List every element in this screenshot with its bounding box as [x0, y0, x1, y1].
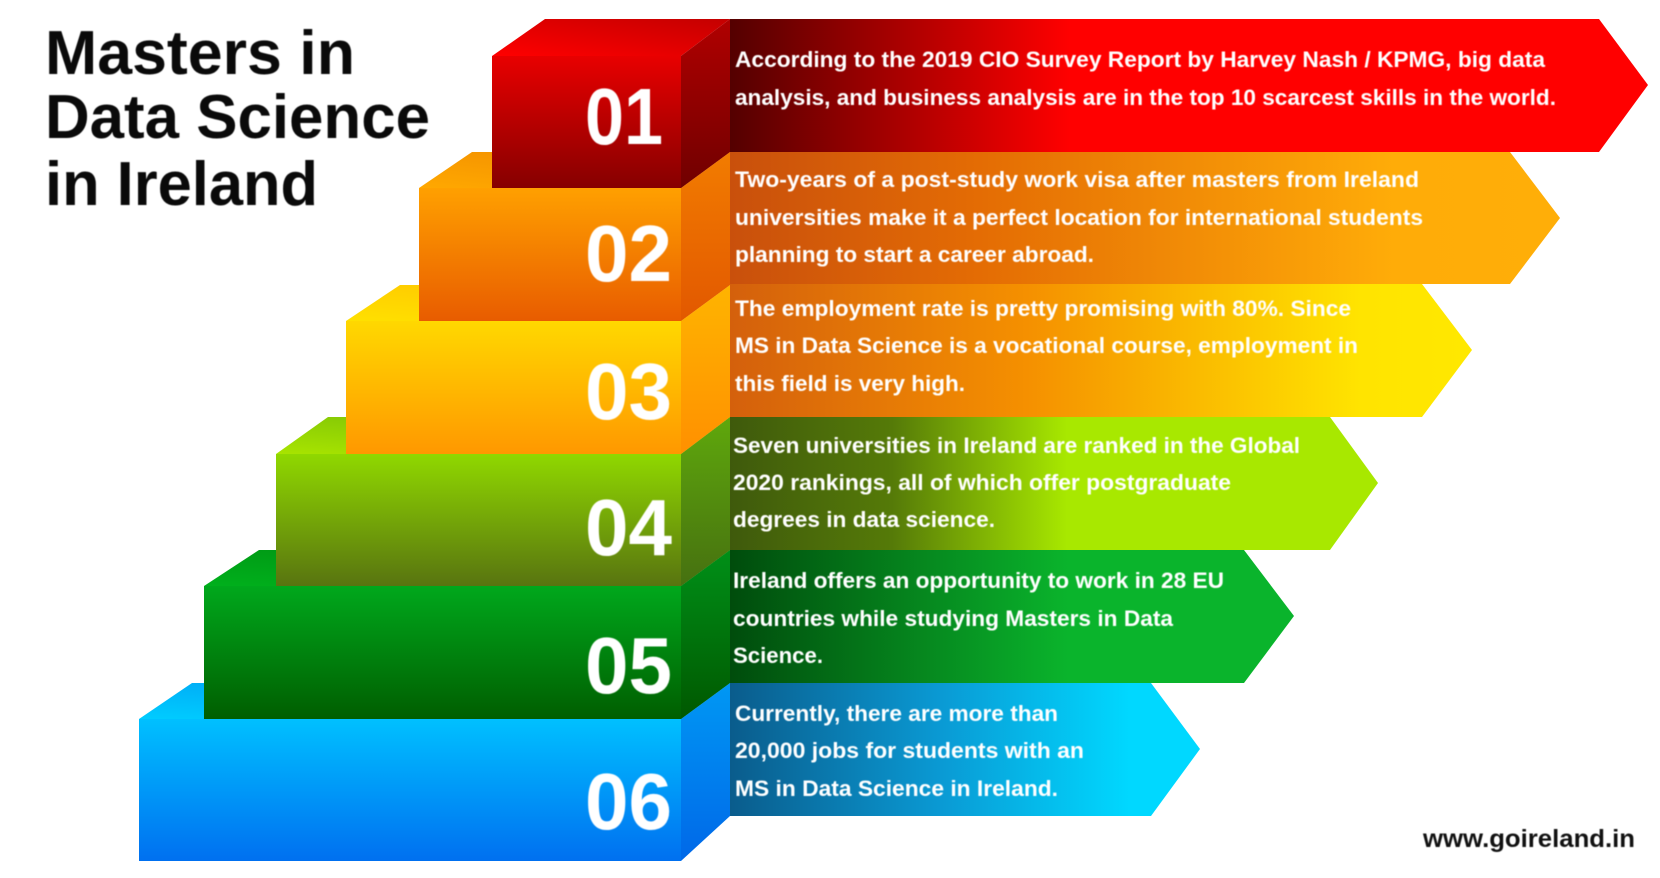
arrow 04: degrees in data science.: [733, 507, 995, 532]
step 04 block: 04: [585, 483, 672, 572]
arrow 05: Science.: [733, 643, 823, 668]
arrow 01: analysis, and business analysis are in the top 10 scarcest skills in the world.: [735, 85, 1556, 110]
title: Masters in: [45, 19, 355, 88]
arrow 05: [730, 550, 1294, 683]
arrow 03: this field is very high.: [735, 371, 965, 396]
arrow 02: Two-years of a post-study work visa after masters from Ireland: [735, 167, 1419, 192]
arrow 05: Ireland offers an opportunity to work in 28 EU: [733, 568, 1224, 593]
arrow 02: planning to start a career abroad.: [735, 242, 1094, 267]
arrow 01: According to the 2019 CIO Survey Report by Harvey Nash / KPMG, big data: [735, 47, 1546, 72]
arrow 03: MS in Data Science is a vocational course, employment in: [735, 333, 1358, 358]
step 02 block: [419, 152, 730, 321]
arrow 02: universities make it a perfect location for international students: [735, 205, 1423, 230]
arrow 01: [730, 19, 1648, 152]
step 01 block: 01: [585, 72, 663, 161]
title: [45, 19, 430, 219]
step 06 block: 06: [585, 757, 672, 846]
step 04 block: [276, 417, 730, 586]
arrow 04: [730, 417, 1378, 550]
step 03 block: 03: [585, 347, 672, 436]
step 02 block: 02: [585, 209, 672, 298]
arrow 06: Currently, there are more than: [735, 701, 1058, 726]
title: Data Science: [45, 83, 430, 152]
step 05 block: [204, 550, 730, 719]
arrow 06: MS in Data Science in Ireland.: [735, 776, 1058, 801]
arrow 02: [730, 152, 1560, 284]
arrow 03: The employment rate is pretty promising with 80%. Since: [735, 296, 1351, 321]
step 03 block: [346, 285, 730, 454]
title: in Ireland: [45, 150, 318, 219]
arrow 06: 20,000 jobs for students with an: [735, 738, 1084, 763]
website url: www.goireland.in: [1422, 825, 1635, 853]
arrow 04: Seven universities in Ireland are ranked in the Global: [733, 433, 1300, 458]
step 01 block: [492, 19, 730, 188]
arrow 03: [730, 284, 1472, 417]
arrow 05: countries while studying Masters in Data: [733, 606, 1174, 631]
step 06 block: [139, 683, 730, 861]
step 05 block: 05: [585, 621, 672, 710]
arrow 06: [730, 683, 1200, 816]
arrow 04: 2020 rankings, all of which offer postgraduate: [733, 470, 1231, 495]
